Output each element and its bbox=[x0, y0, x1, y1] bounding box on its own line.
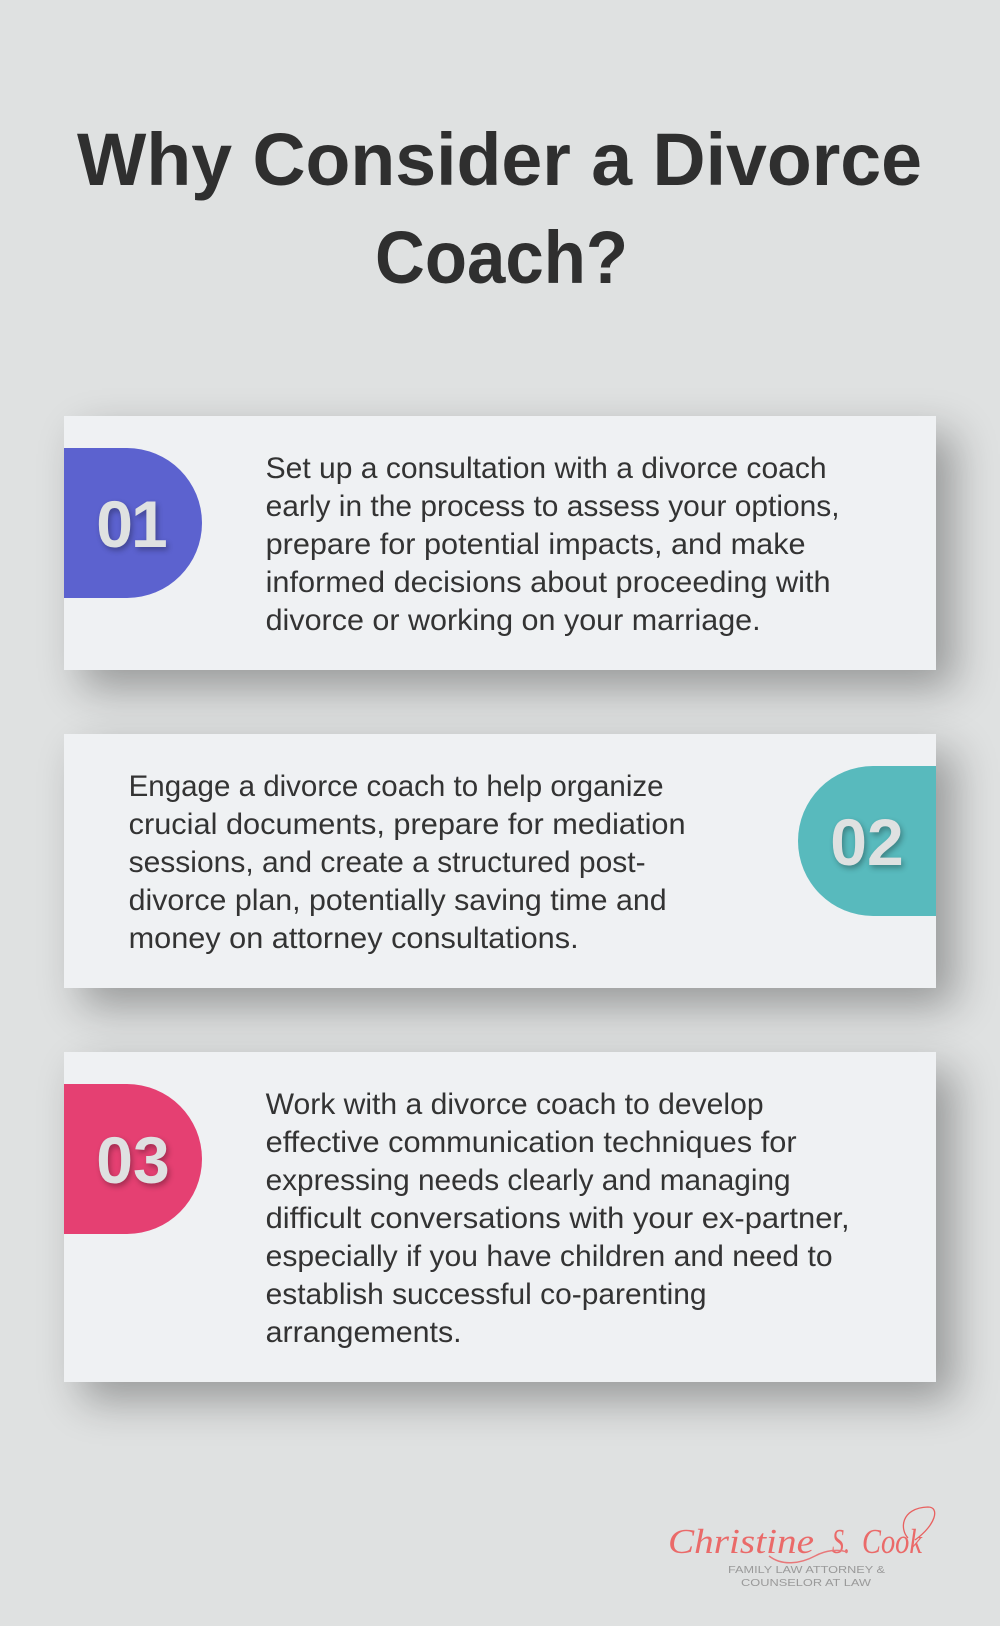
title: Why Consider a Divorce bbox=[77, 118, 922, 201]
text: step 03: Work with a divorce coach to develop bbox=[266, 1088, 764, 1121]
badge: 02 bbox=[798, 766, 936, 916]
logo: Christine S. Cook: COUNSELOR AT LAW bbox=[741, 1577, 871, 1589]
logo: Christine S. Cook: FAMILY LAW ATTORNEY & bbox=[728, 1564, 885, 1576]
text: step 02: crucial documents, prepare for mediation bbox=[129, 808, 686, 841]
text: step 01 bbox=[266, 452, 840, 637]
text: step 01: early in the process to assess your options, bbox=[266, 490, 840, 523]
text: step 02: divorce plan, potentially saving time and bbox=[129, 884, 667, 917]
text: step 03: especially if you have children and need to bbox=[266, 1240, 833, 1273]
logo: Christine S. Cook: Cook bbox=[862, 1522, 923, 1561]
text: step 02: sessions, and create a structured post- bbox=[129, 846, 646, 879]
text: step 03: arrangements. bbox=[266, 1316, 462, 1349]
panel: step 01 bbox=[64, 416, 936, 670]
text: step 01: Set up a consultation with a divorce coach bbox=[266, 452, 827, 485]
text: step 02 bbox=[129, 770, 686, 955]
badge: 03: 03 bbox=[96, 1123, 170, 1197]
logo: Christine S. Cook: S. bbox=[832, 1522, 850, 1561]
text: step 03: establish successful co-parenting bbox=[266, 1278, 707, 1311]
text: step 03: difficult conversations with your ex-partner, bbox=[266, 1202, 850, 1235]
badge: 01 bbox=[64, 448, 202, 598]
text: step 03 bbox=[266, 1088, 850, 1349]
badge: 02: 02 bbox=[830, 805, 904, 879]
panel: step 03 bbox=[64, 1052, 936, 1382]
logo: Christine S. Cook: Christine bbox=[668, 1522, 814, 1561]
text: step 03: effective communication techniques for bbox=[266, 1126, 797, 1159]
title: Coach? bbox=[375, 216, 628, 299]
text: step 01: prepare for potential impacts, and make bbox=[266, 528, 806, 561]
text: step 02: money on attorney consultations. bbox=[129, 922, 579, 955]
title bbox=[77, 118, 922, 299]
panel: step 02 bbox=[64, 734, 936, 988]
badge: 01: 01 bbox=[96, 487, 166, 561]
text: step 01: informed decisions about proceeding with bbox=[266, 566, 831, 599]
text: step 03: expressing needs clearly and managing bbox=[266, 1164, 791, 1197]
badge: 03 bbox=[64, 1084, 202, 1234]
text: step 02: Engage a divorce coach to help organize bbox=[129, 770, 664, 803]
text: step 01: divorce or working on your marriage. bbox=[266, 604, 761, 637]
